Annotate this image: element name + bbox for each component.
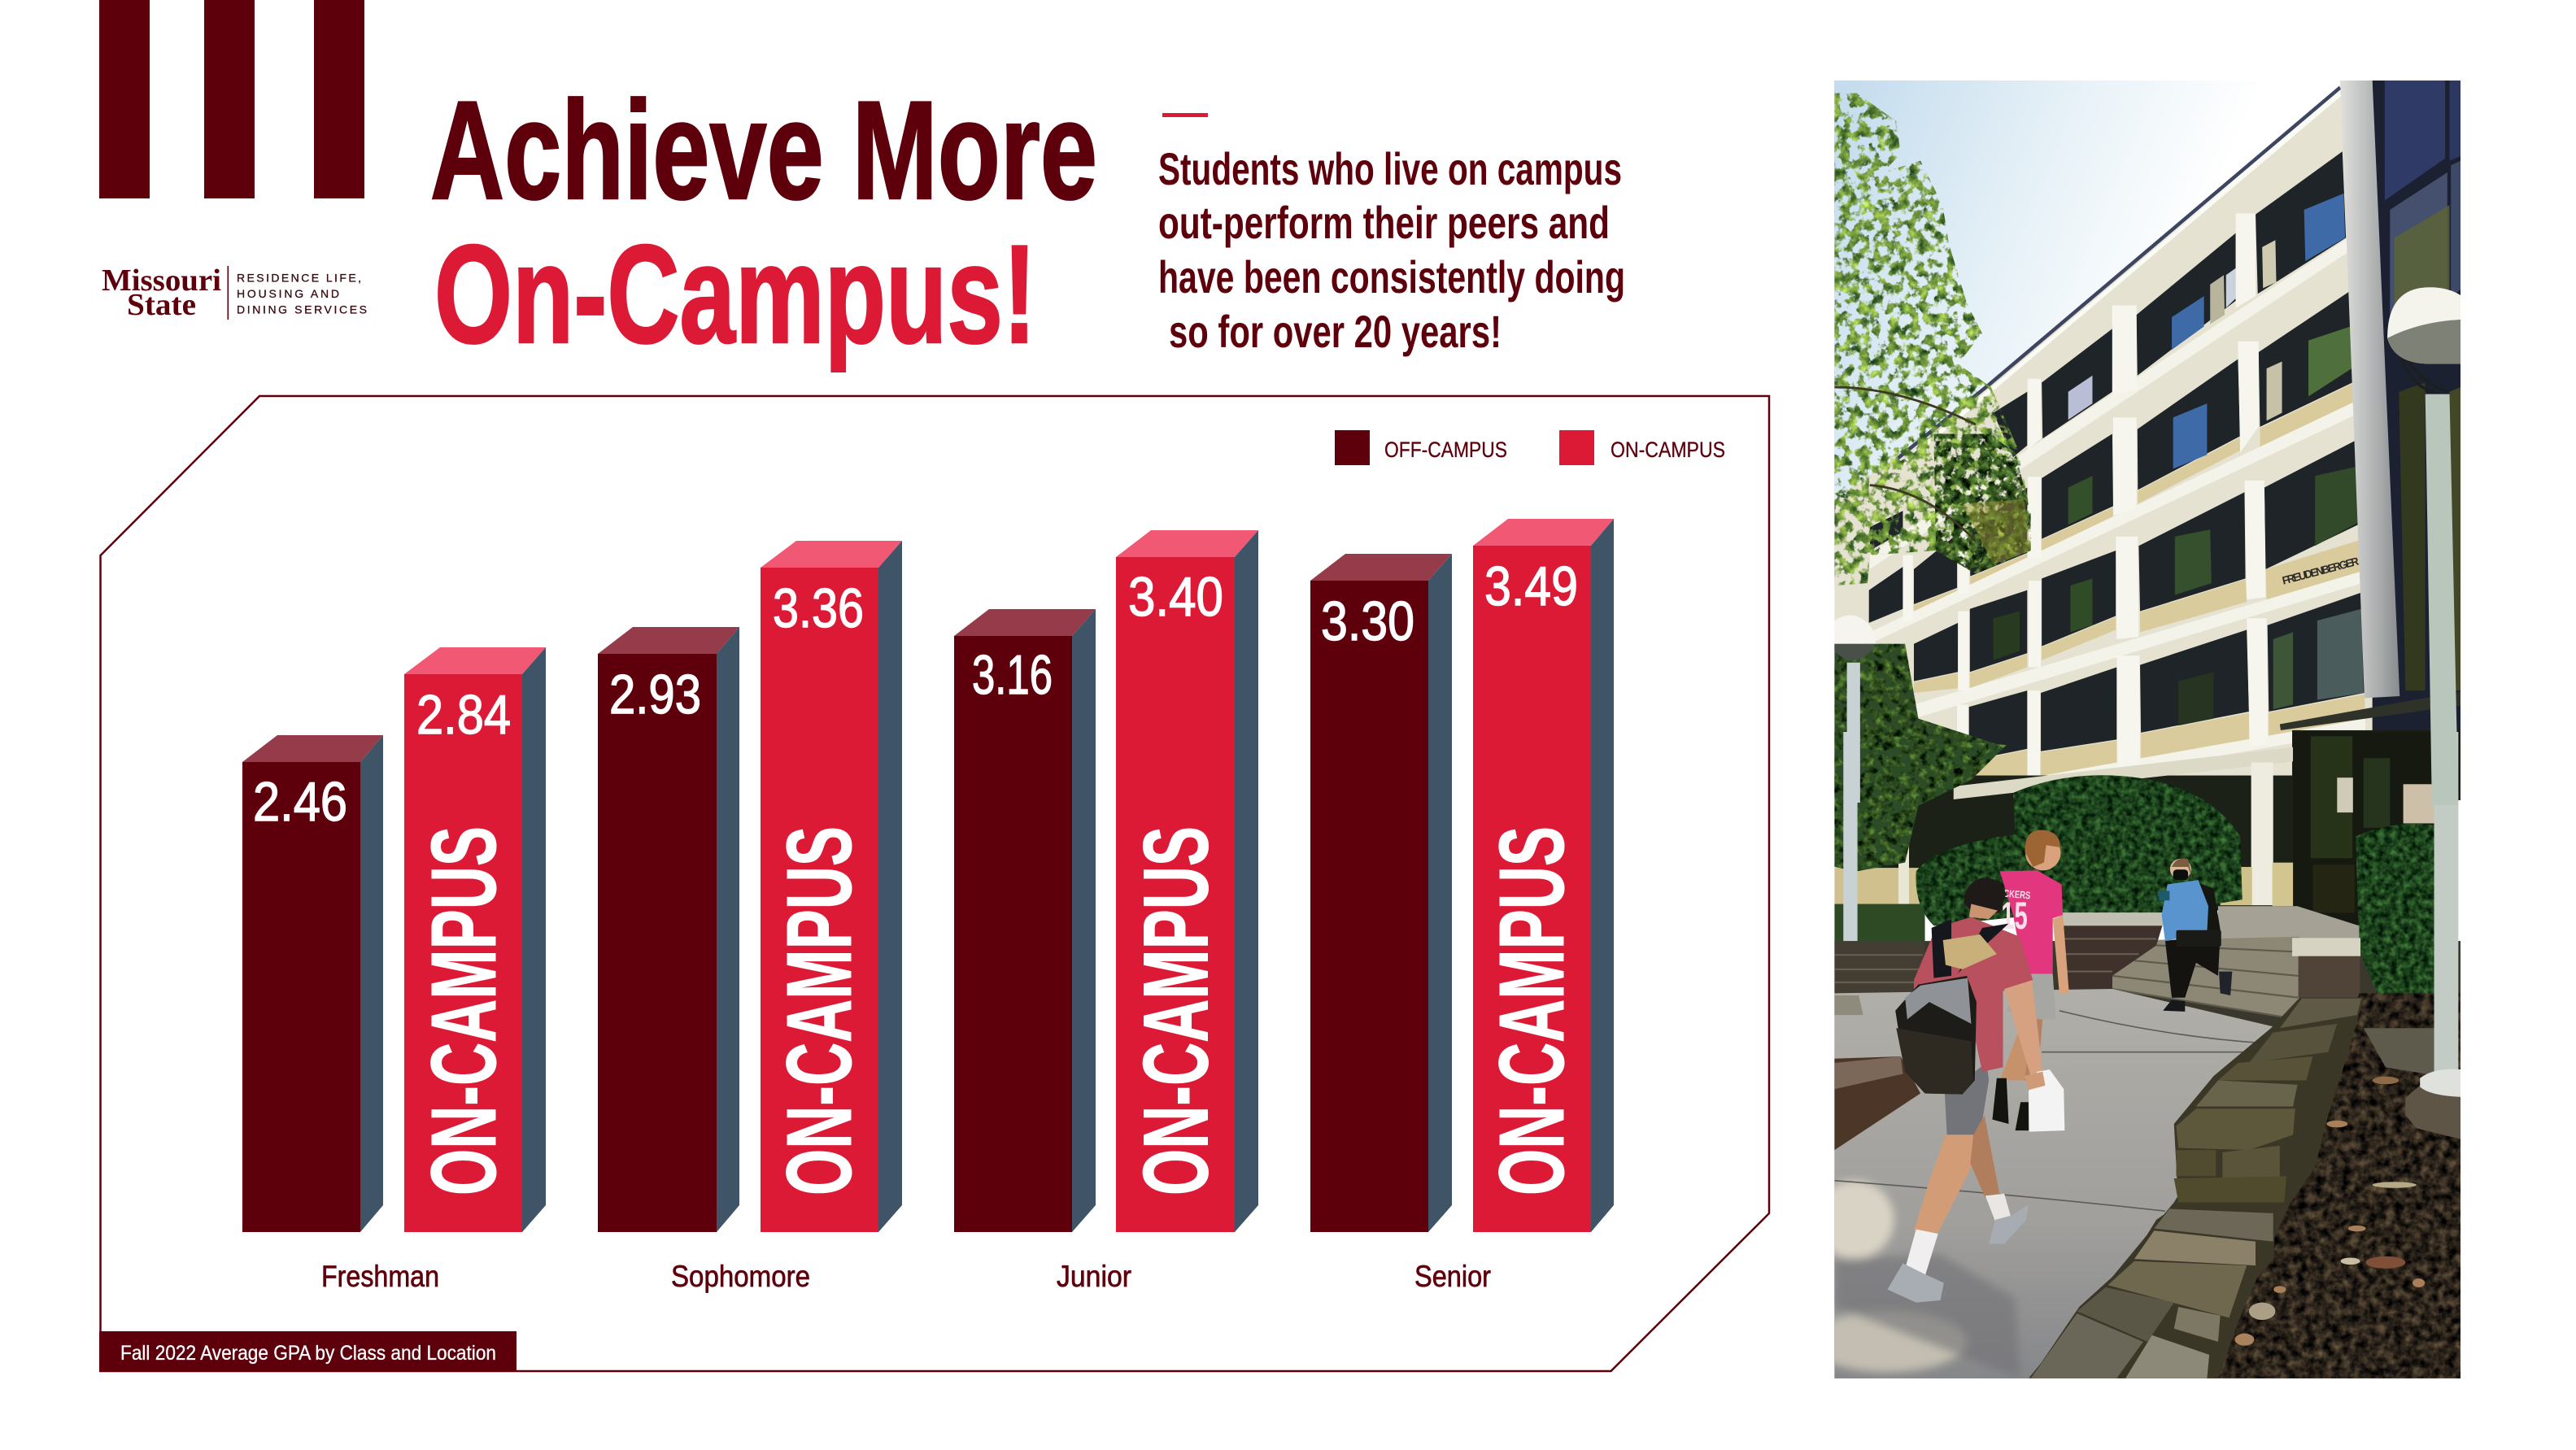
intro paragraph — [1158, 143, 1625, 357]
Sophomore group: 3.36 — [773, 577, 864, 639]
photo: ground level — [1808, 732, 2460, 1378]
soil and leaves — [2214, 993, 2460, 1378]
person: student in pink shirt: ICKERS — [2001, 887, 2031, 902]
left stone planter — [1834, 1056, 1920, 1150]
Junior group: ON-CAMPUS — [1124, 826, 1227, 1195]
logo: Missouri State Residence Life, Housing and Dining Services — [102, 263, 367, 322]
retaining stone wall — [2031, 998, 2364, 1378]
pavement — [1834, 989, 2280, 1378]
logo: Missouri State Residence Life, Housing and Dining Services: Missouri — [102, 263, 221, 298]
category labels: Junior — [1057, 1260, 1131, 1293]
category labels: Freshman — [321, 1260, 439, 1293]
logo: Missouri State Residence Life, Housing and Dining Services: State — [127, 288, 196, 322]
door and entry — [2293, 732, 2434, 925]
photo: trees — [1834, 93, 2031, 797]
brick bands — [1914, 383, 2365, 789]
title — [430, 72, 1097, 372]
legend — [1335, 430, 1725, 465]
title: On-Campus! — [434, 216, 1036, 372]
intro paragraph: Students who live on campus — [1158, 143, 1622, 194]
lamp pedestal and pole — [2405, 1085, 2460, 1139]
decorative top stripes — [99, 0, 364, 198]
chart caption tab — [99, 1331, 517, 1372]
intro paragraph: out-perform their peers and — [1158, 197, 1610, 248]
intro paragraph: so for over 20 years! — [1169, 306, 1502, 357]
title: Achieve More — [430, 72, 1097, 229]
legend: OFF-CAMPUS — [1384, 438, 1507, 462]
person: woman in blue shirt with mask — [2159, 859, 2232, 1012]
left tree over brick — [1834, 732, 2007, 871]
Senior group: 3.49 — [1484, 555, 1578, 617]
Freshman group — [242, 647, 546, 1232]
category labels: Senior — [1414, 1260, 1491, 1293]
person: student in pink shirt — [1992, 830, 2069, 1130]
Freshman group: ON-CAMPUS — [412, 826, 515, 1195]
photo: students walking outside Freudenberger residence hall — [1808, 74, 2465, 1378]
chart panel frame — [101, 396, 1769, 1371]
building sign: FREUDENBERGER — [2281, 555, 2360, 587]
chart caption tab: Fall 2022 Average GPA by Class and Location — [120, 1342, 496, 1365]
logo: Missouri State Residence Life, Housing and Dining Services: HOUSING AND — [237, 287, 339, 300]
pillars — [1903, 214, 2268, 779]
Freshman group: 2.84 — [416, 684, 511, 746]
Sophomore group: ON-CAMPUS — [768, 826, 870, 1195]
category labels — [321, 1260, 1491, 1293]
photo: lamp posts — [1834, 287, 2465, 805]
intro paragraph: have been consistently doing — [1158, 251, 1625, 303]
entrance canopy — [2280, 691, 2460, 730]
Sophomore group — [598, 541, 902, 1232]
Senior group: ON-CAMPUS — [1480, 826, 1583, 1195]
floor slabs — [1870, 239, 2365, 800]
glass stair tower — [2373, 81, 2463, 734]
windows — [1869, 151, 2365, 760]
Senior group — [1310, 519, 1614, 1232]
Junior group: 3.40 — [1128, 566, 1223, 628]
glass reflections — [1994, 194, 2364, 725]
person: student in pink shirt: 15 — [2001, 895, 2028, 938]
photo: building and sky — [1830, 74, 2465, 803]
legend: ON-CAMPUS — [1611, 438, 1725, 462]
accent dash — [1162, 113, 1208, 117]
hedges — [1916, 775, 2243, 925]
person: student with backpack and water jug — [1887, 877, 2064, 1303]
Senior group: 3.30 — [1321, 590, 1414, 652]
category labels: Sophomore — [671, 1260, 810, 1293]
Junior group — [954, 530, 1258, 1232]
logo: Missouri State Residence Life, Housing and Dining Services: RESIDENCE LIFE, — [237, 272, 361, 285]
stairs and low walls — [2218, 906, 2359, 941]
Junior group: 3.16 — [972, 644, 1053, 706]
Sophomore group: 2.93 — [609, 664, 701, 725]
Freshman group: 2.46 — [253, 771, 347, 833]
bar chart: Fall 2022 average GPA — [242, 519, 1614, 1232]
logo: Missouri State Residence Life, Housing and Dining Services: DINING SERVICES — [237, 303, 367, 316]
